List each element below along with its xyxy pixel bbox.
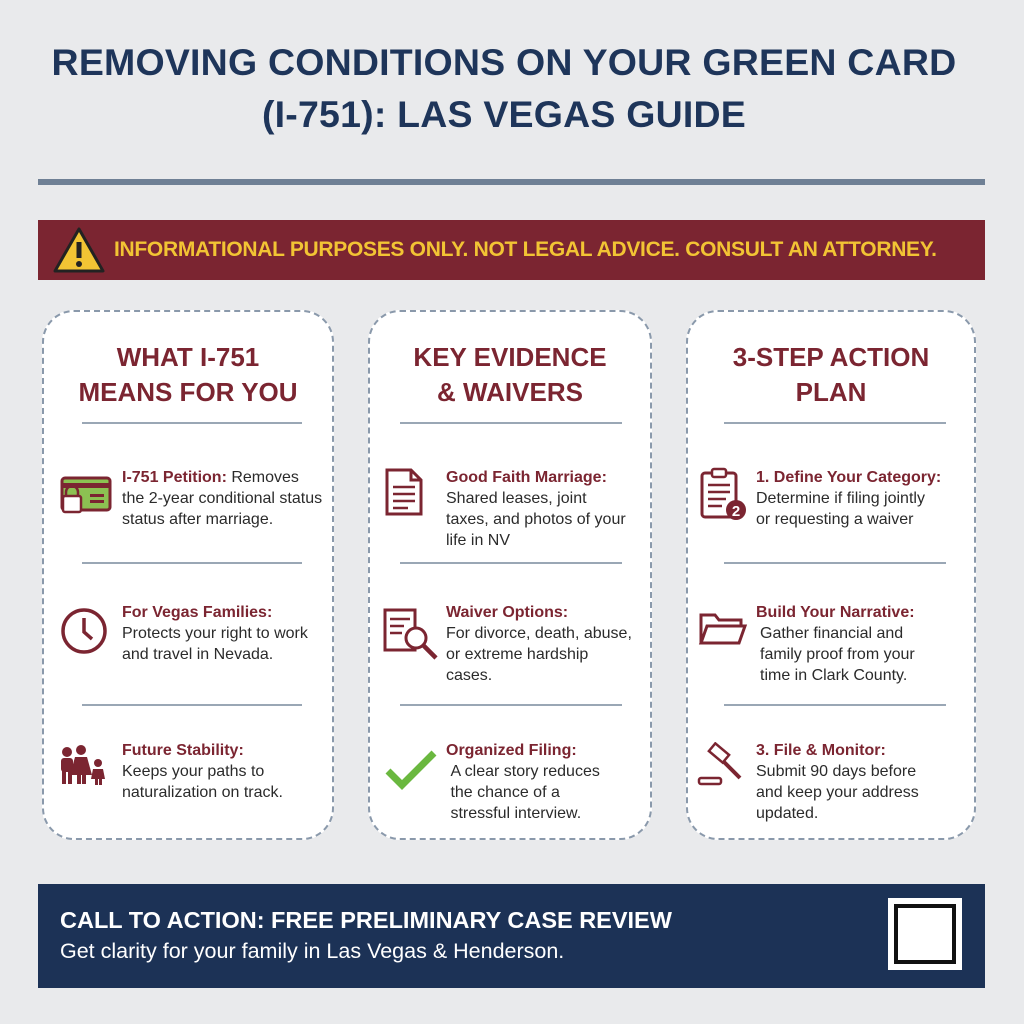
item: organized filing: the chance of a <box>450 784 560 801</box>
panel: what I-751 means: MEANS FOR YOU <box>78 377 298 407</box>
item: organized filing: stressful interview. <box>450 805 581 822</box>
item: petition <box>122 469 322 528</box>
panel: action plan: PLAN <box>796 377 866 407</box>
item: waiver options: Waiver Options: <box>446 604 568 621</box>
item: define category: Determine if filing jointly <box>756 490 925 507</box>
item: future stability: Keeps your paths to <box>122 763 264 780</box>
item: vegas families <box>122 604 308 663</box>
title: (I-751): LAS VEGAS GUIDE <box>262 93 746 135</box>
item: vegas families: For Vegas Families: <box>122 604 272 621</box>
item: good faith: Good Faith Marriage: <box>446 469 607 486</box>
icon: gavel <box>698 742 742 786</box>
item: petition: I-751 Petition: Removes <box>122 469 299 486</box>
item: file monitor: 3. File & Monitor: <box>756 742 886 759</box>
icon: document <box>386 468 422 516</box>
item: define category <box>756 469 941 528</box>
item: organized filing: A clear story reduces <box>450 763 600 780</box>
item: organized filing: Organized Filing: <box>446 742 577 759</box>
item: good faith <box>446 469 626 549</box>
item: build narrative: time in Clark County. <box>760 667 907 684</box>
item: organized filing <box>446 742 600 822</box>
panel: key evidence: & WAIVERS <box>437 377 583 407</box>
item: waiver options: cases. <box>446 667 492 684</box>
panel: key evidence <box>368 310 652 840</box>
disclaimer banner <box>38 220 985 280</box>
item: vegas families: Protects your right to work <box>122 625 308 642</box>
item: waiver options: For divorce, death, abuse, <box>446 625 632 642</box>
item: future stability: Future Stability: <box>122 742 244 759</box>
icon: QR placeholder <box>888 898 962 970</box>
icon: family <box>61 745 105 785</box>
footer: call to action <box>38 884 985 988</box>
icon: warning <box>54 227 104 272</box>
footer: call to action: CALL TO ACTION: FREE PRELIMINARY CASE REVIEW <box>60 907 672 933</box>
title: REMOVING CONDITIONS ON YOUR GREEN CARD <box>52 41 956 83</box>
item: petition: status after marriage. <box>122 511 273 528</box>
item: future stability: naturalization on track. <box>122 784 283 801</box>
item: build narrative <box>756 604 915 684</box>
panel: what I-751 means: WHAT I-751 <box>117 342 259 372</box>
footer: call to action: Get clarity for your family in Las Vegas & Henderson. <box>60 939 564 963</box>
item: good faith: Shared leases, joint <box>446 490 587 507</box>
panel: key evidence: KEY EVIDENCE <box>413 342 607 372</box>
item: petition: the 2-year conditional status <box>122 490 322 507</box>
panel: action plan: 3-STEP ACTION <box>733 342 929 372</box>
item: vegas families: and travel in Nevada. <box>122 646 273 663</box>
item: build narrative: Gather financial and <box>760 625 903 642</box>
item: file monitor: and keep your address <box>756 784 919 801</box>
title <box>52 41 956 135</box>
item: waiver options <box>446 604 632 684</box>
item: define category: or requesting a waiver <box>756 511 913 528</box>
panel: action plan <box>686 310 976 840</box>
item: build narrative: Build Your Narrative: <box>756 604 915 621</box>
icon: clipboard: 2 <box>732 503 740 520</box>
item: future stability <box>122 742 283 801</box>
icon: folder <box>698 614 748 644</box>
item: define category: 1. Define Your Category: <box>756 469 941 486</box>
icon: clock <box>61 608 107 654</box>
item: good faith: taxes, and photos of your <box>446 511 626 528</box>
item: build narrative: family proof from your <box>760 646 915 663</box>
panel: what I-751 means <box>42 310 334 840</box>
item: file monitor: Submit 90 days before <box>756 763 916 780</box>
icon: magnifier doc <box>384 608 438 660</box>
icon: green card <box>60 476 112 514</box>
item: waiver options: or extreme hardship <box>446 646 588 663</box>
item: good faith: life in NV <box>446 532 510 549</box>
icon: check <box>386 750 436 790</box>
item: file monitor: updated. <box>756 805 818 822</box>
icon: clipboard <box>700 468 746 520</box>
item: file monitor <box>756 742 919 822</box>
disclaimer banner: INFORMATIONAL PURPOSES ONLY. NOT LEGAL ADVICE. CONSULT AN ATTORNEY. <box>114 238 937 261</box>
